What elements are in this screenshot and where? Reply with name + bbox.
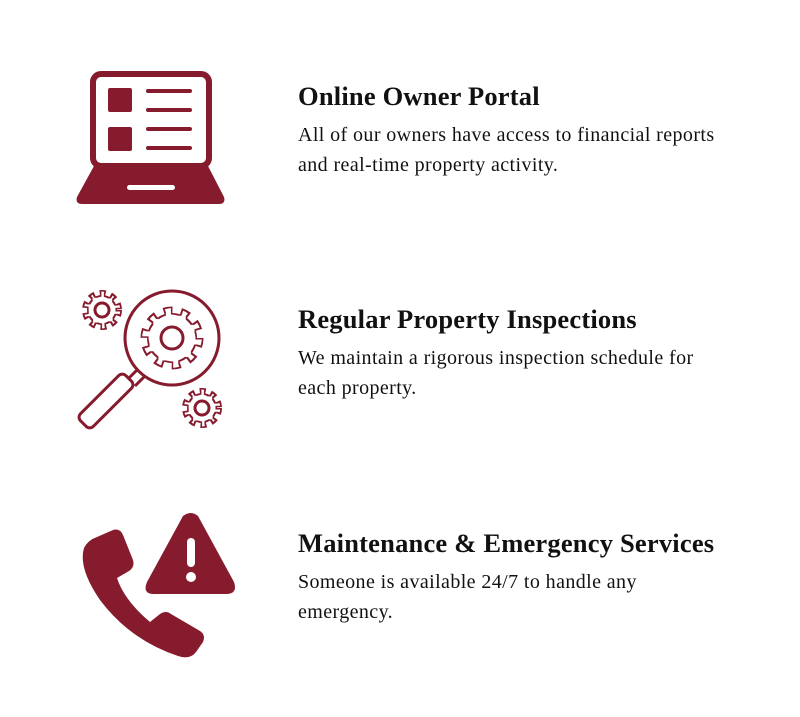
text: inspections description: We maintain a rigorous inspection schedule for [298, 347, 694, 369]
heading: Maintenance & Emergency Services: Maintenance & Emergency Services [298, 528, 714, 558]
icon: phone and warning [83, 513, 235, 657]
text: maintenance description: emergency. [298, 601, 393, 623]
heading: Regular Property Inspections: Regular Property Inspections [298, 304, 637, 334]
text: portal description [298, 124, 715, 176]
text: maintenance description [298, 571, 637, 623]
text: portal description: and real-time property activity. [298, 154, 558, 176]
icon: laptop [77, 74, 224, 204]
text: inspections description: each property. [298, 377, 417, 399]
text: portal description: All of our owners have access to financial reports [298, 124, 715, 146]
heading: Online Owner Portal: Online Owner Portal [298, 81, 540, 111]
text: maintenance description: Someone is available 24/7 to handle any [298, 571, 637, 593]
text: inspections description [298, 347, 694, 399]
icon: magnifier with gears [77, 291, 219, 430]
